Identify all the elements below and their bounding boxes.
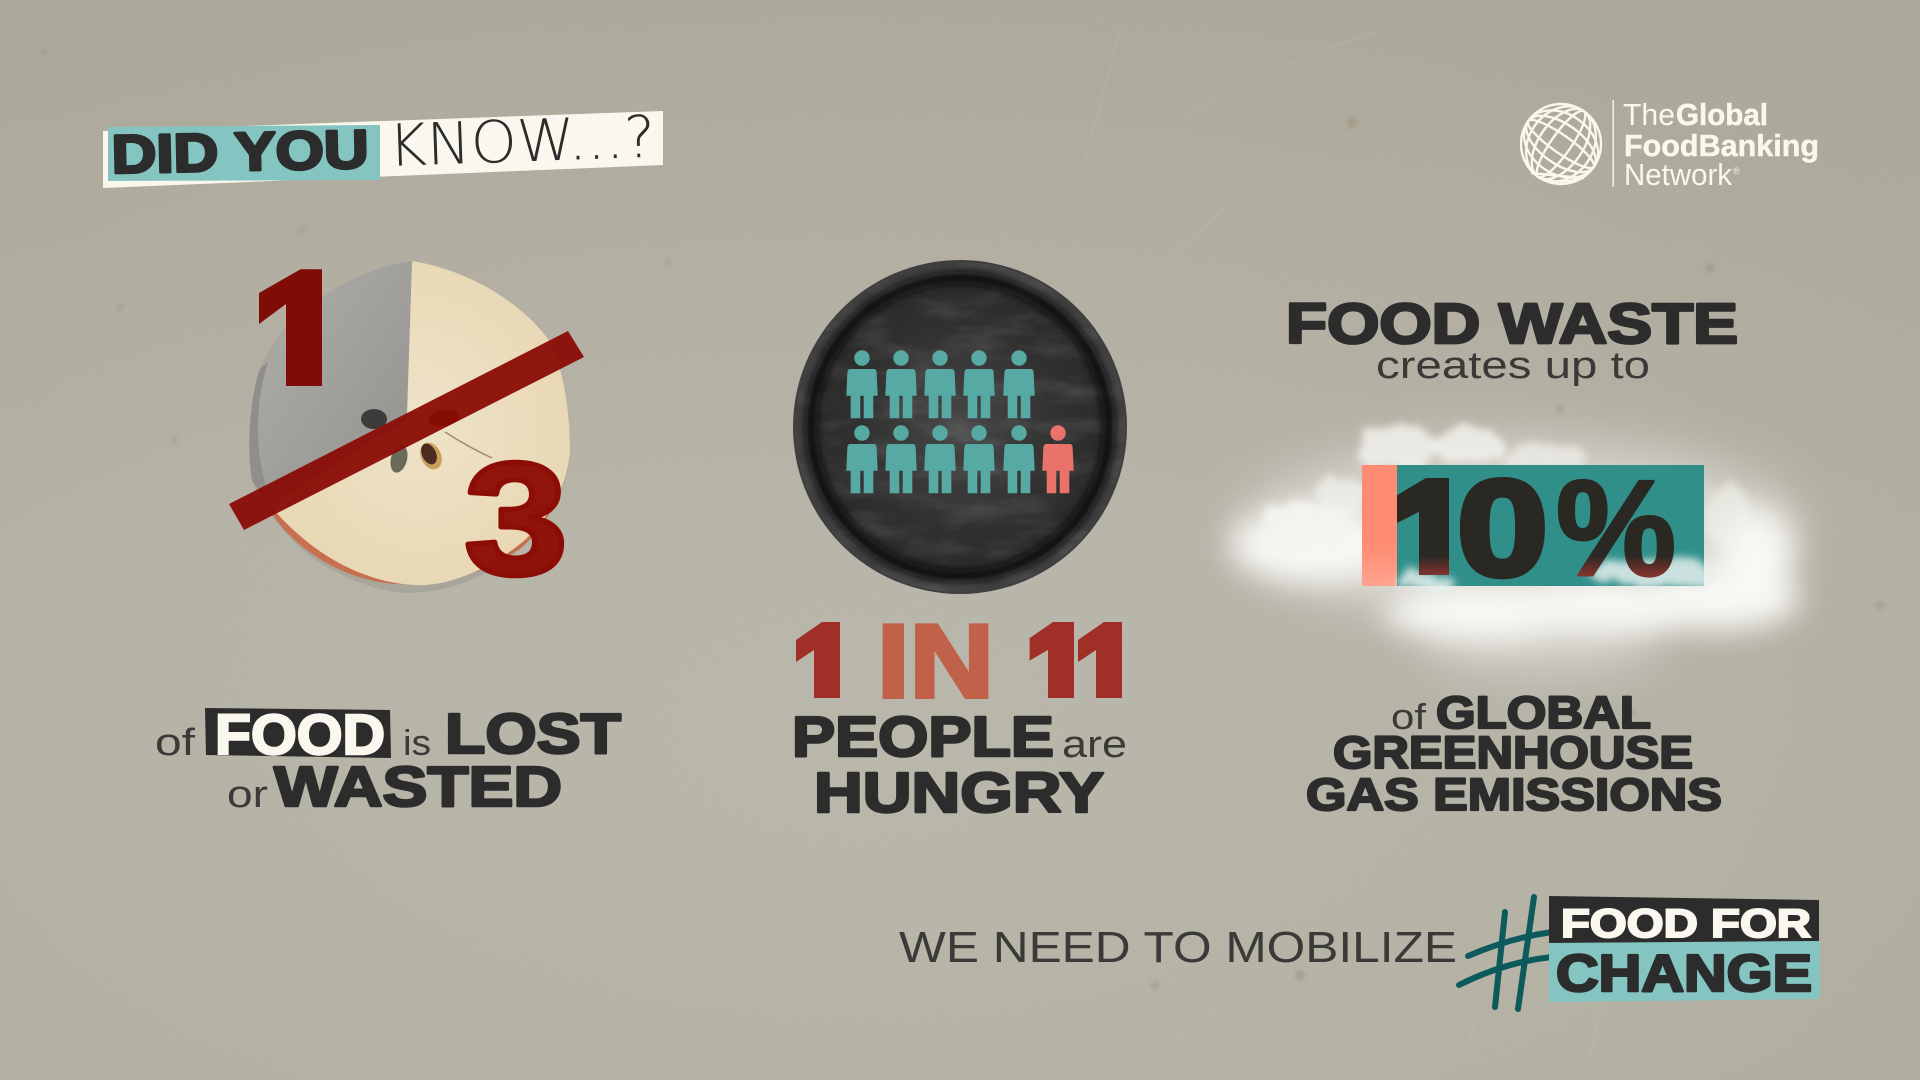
caption: people are hungry: HUNGRY <box>814 761 1104 825</box>
subheading: creates up to: creates up to <box>1376 345 1650 387</box>
know: KNOW...? <box>387 103 656 180</box>
hashtag: food for change <box>1549 896 1820 1003</box>
number one: 1 <box>255 243 345 423</box>
stat box: 10 percent: % <box>1556 452 1676 604</box>
caption: people are hungry: are <box>1062 724 1127 766</box>
caption: of global greenhouse gas emissions: GLOBAL <box>1436 687 1651 738</box>
icon: apple seeds <box>361 407 492 475</box>
food label: FOOD <box>215 703 385 767</box>
hashtag: food for change: FOOD FOR <box>1561 902 1811 946</box>
panel: one third of food <box>155 243 621 819</box>
caption: of global greenhouse gas emissions: GREENHOUSE <box>1333 727 1693 778</box>
stat box: 10 percent: 0 <box>1457 452 1548 604</box>
logo text <box>1623 97 1819 192</box>
caption: of food is lost or wasted: of <box>155 722 196 764</box>
logo text: ® <box>1733 166 1740 176</box>
caption: of food is lost or wasted: WASTED <box>274 755 562 819</box>
panel: food waste emissions <box>1230 292 1800 820</box>
logo: global foodbanking network <box>1511 93 1819 195</box>
heading: food waste: FOOD WASTE <box>1286 292 1738 356</box>
caption: people are hungry <box>792 705 1127 825</box>
caption: of global greenhouse gas emissions: GAS EMISSIONS <box>1306 769 1722 820</box>
caption: of food is lost or wasted: is <box>403 722 431 763</box>
icon: apple slice <box>249 261 570 593</box>
caption: people are hungry: PEOPLE <box>792 705 1054 769</box>
caption: of food is lost or wasted <box>155 702 621 819</box>
stat: 1 in 11: IN <box>877 604 994 720</box>
stat: 1 in 11: 111 <box>795 607 1135 723</box>
logo text: Network <box>1624 157 1732 192</box>
text: we need to mobilize: WE NEED TO MOBILIZE <box>899 923 1457 972</box>
panel: one in eleven hungry <box>792 260 1135 825</box>
call to action <box>899 896 1820 1009</box>
icon: hash mark <box>1459 897 1552 1009</box>
pictogram: ten teal people and one coral person <box>846 350 1074 493</box>
number three: 3 <box>464 429 568 608</box>
icon: globe <box>1511 93 1611 195</box>
logo text: FoodBanking <box>1624 128 1819 163</box>
caption: of global greenhouse gas emissions: of <box>1391 696 1427 737</box>
caption: of global greenhouse gas emissions <box>1306 687 1722 820</box>
caption: of food is lost or wasted: or <box>227 774 268 816</box>
stat: 1 in 11 <box>796 622 1122 699</box>
hashtag: food for change: CHANGE <box>1556 945 1812 1003</box>
icon: cloud <box>1230 424 1800 670</box>
logo text: Global <box>1676 97 1768 132</box>
stat box: 10 percent: 1 <box>1393 455 1469 607</box>
did you: DID YOU <box>111 120 369 185</box>
caption: of food is lost or wasted: LOST <box>445 702 621 766</box>
fraction slash <box>229 331 584 530</box>
logo text: The <box>1623 97 1675 132</box>
stat box: 10 percent <box>1362 465 1710 592</box>
icon: dark plate <box>793 260 1127 594</box>
heading: did you know <box>103 103 663 188</box>
